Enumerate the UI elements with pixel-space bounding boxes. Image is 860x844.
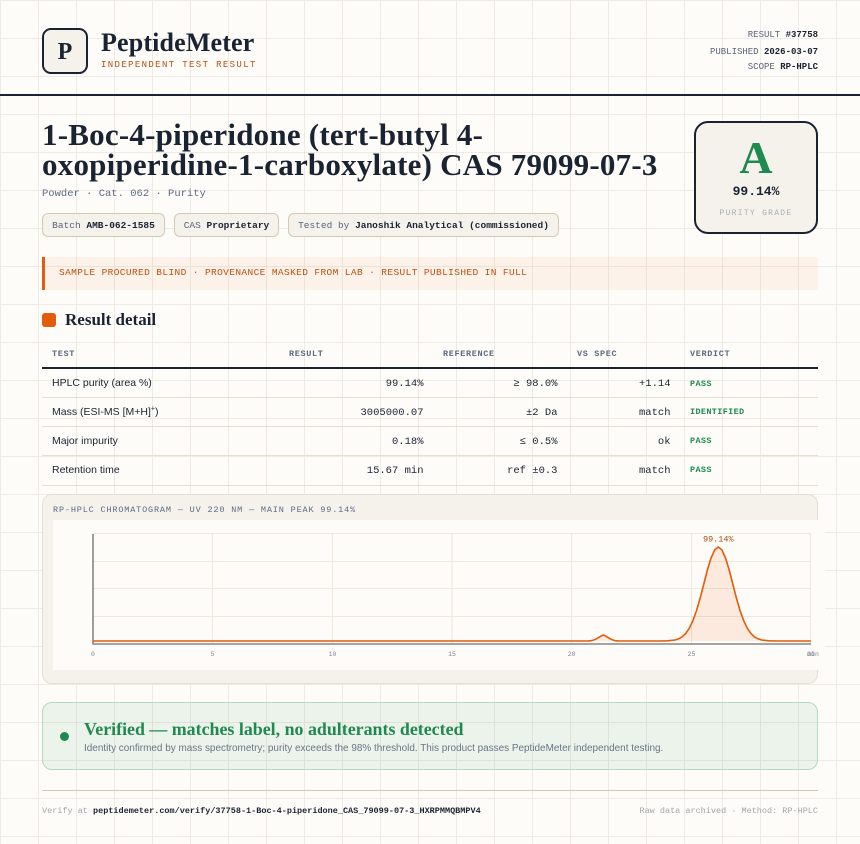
status dot: [60, 732, 69, 741]
column: vs spec: VS SPEC: [577, 349, 617, 359]
section title: Result detail: [65, 310, 156, 329]
row: retention time: match: [639, 464, 670, 476]
x axis labels: [91, 651, 819, 658]
result meta: SCOPE RP-HPLC: [748, 62, 818, 72]
row: hplc purity: +1.14: [639, 378, 670, 390]
x axis labels: 30: [807, 651, 815, 658]
notice banner: SAMPLE PROCURED BLIND · PROVENANCE MASKED FROM LAB · RESULT PUBLISHED IN FULL: [59, 267, 527, 278]
row: mass: match: [639, 406, 670, 418]
peak area: [93, 547, 811, 641]
notice banner: [42, 257, 818, 290]
column: reference: REFERENCE: [443, 349, 495, 359]
section heading: [42, 310, 156, 329]
row: major impurity: ok: [658, 436, 670, 448]
product title: oxopiperidine-1-carboxylate) CAS 79099-07-3: [42, 147, 658, 182]
header rule: [0, 94, 860, 96]
result meta: [710, 30, 818, 72]
row: major impurity: ≤ 0.5%: [520, 436, 558, 448]
row: mass: ±2 Da: [526, 406, 558, 418]
row: major impurity: PASS: [690, 436, 712, 446]
row: major impurity: 0.18%: [392, 436, 424, 448]
row: hplc purity: PASS: [690, 379, 712, 389]
x axis labels: 20: [568, 651, 576, 658]
row: retention time: Retention time: [52, 464, 120, 476]
brand name: PeptideMeter: [101, 28, 254, 57]
chip: tested by: [288, 213, 559, 237]
brand tagline: INDEPENDENT TEST RESULT: [101, 60, 257, 70]
row: retention time: ref ±0.3: [507, 464, 558, 476]
header: [0, 28, 860, 96]
row: hplc purity: 99.14%: [386, 378, 424, 390]
chip: batch: [42, 213, 165, 237]
result table: [42, 349, 818, 486]
chart title: RP-HPLC CHROMATOGRAM — UV 220 NM — MAIN PEAK 99.14%: [53, 505, 356, 515]
chromatogram chart: [53, 520, 825, 670]
x axis labels: 25: [688, 651, 695, 658]
logo mark: [42, 28, 88, 74]
axes: [93, 534, 811, 644]
logo mark: P: [58, 39, 72, 65]
footer: [42, 790, 818, 821]
column: test: TEST: [52, 349, 75, 359]
row: mass: Mass (ESI-MS [M+H]+): [52, 406, 158, 418]
peak label: 99.14%: [703, 534, 734, 544]
product title: [42, 117, 658, 182]
result meta: PUBLISHED 2026-03-07: [710, 46, 818, 56]
row: major impurity: Major impurity: [52, 435, 118, 447]
chip: batch: Batch AMB-062-1585: [52, 220, 155, 231]
grade card: [694, 121, 818, 234]
grade caption: PURITY GRADE: [720, 209, 792, 218]
row: mass: [52, 406, 745, 418]
x axis labels: 0: [91, 651, 95, 658]
row: hplc purity: HPLC purity (area %): [52, 377, 152, 389]
row: retention time: [52, 464, 712, 476]
section marker: [42, 313, 56, 327]
verified description: Identity confirmed by mass spectrometry; purity exceeds the 98% threshold. This product passes PeptideMeter independent testing.: [84, 743, 663, 754]
column: verdict: VERDICT: [690, 349, 730, 359]
row: mass: 3005000.07: [360, 406, 424, 418]
chip: cas: [174, 213, 279, 237]
column: result: RESULT: [289, 349, 324, 359]
row: mass: IDENTIFIED: [690, 407, 745, 417]
row: hplc purity: ≥ 98.0%: [513, 378, 558, 390]
chip: tested by: Tested by Janoshik Analytical (commissioned): [298, 220, 549, 231]
purity value: 99.14%: [733, 184, 779, 199]
product title: 1-Boc-4-piperidone (tert-butyl 4-: [42, 117, 483, 152]
grade letter: A: [739, 132, 773, 183]
row: hplc purity: [52, 377, 712, 390]
archive note: Raw data archived · Method: RP-HPLC: [639, 806, 818, 816]
verify link: Verify at peptidemeter.com/verify/37758-1-Boc-4-piperidone_CAS_79099-07-3_HXRPMMQBMPV4: [42, 806, 481, 816]
chromatogram trace: [93, 547, 811, 641]
verified heading: Verified — matches label, no adulterants detected: [84, 719, 463, 739]
x axis labels: min: [807, 651, 819, 658]
row: retention time: 15.67 min: [367, 464, 424, 476]
chip: cas: CAS Proprietary: [184, 220, 269, 231]
x axis labels: 10: [329, 651, 336, 658]
chromatogram panel: [42, 494, 818, 684]
row: major impurity: [52, 435, 712, 448]
row: retention time: PASS: [690, 465, 712, 475]
product subtitle: Powder · Cat. 062 · Purity: [42, 188, 206, 200]
verified callout: [42, 702, 818, 770]
x axis labels: 15: [448, 651, 456, 658]
x axis labels: 5: [211, 651, 215, 658]
result meta: RESULT #37758: [748, 30, 818, 40]
